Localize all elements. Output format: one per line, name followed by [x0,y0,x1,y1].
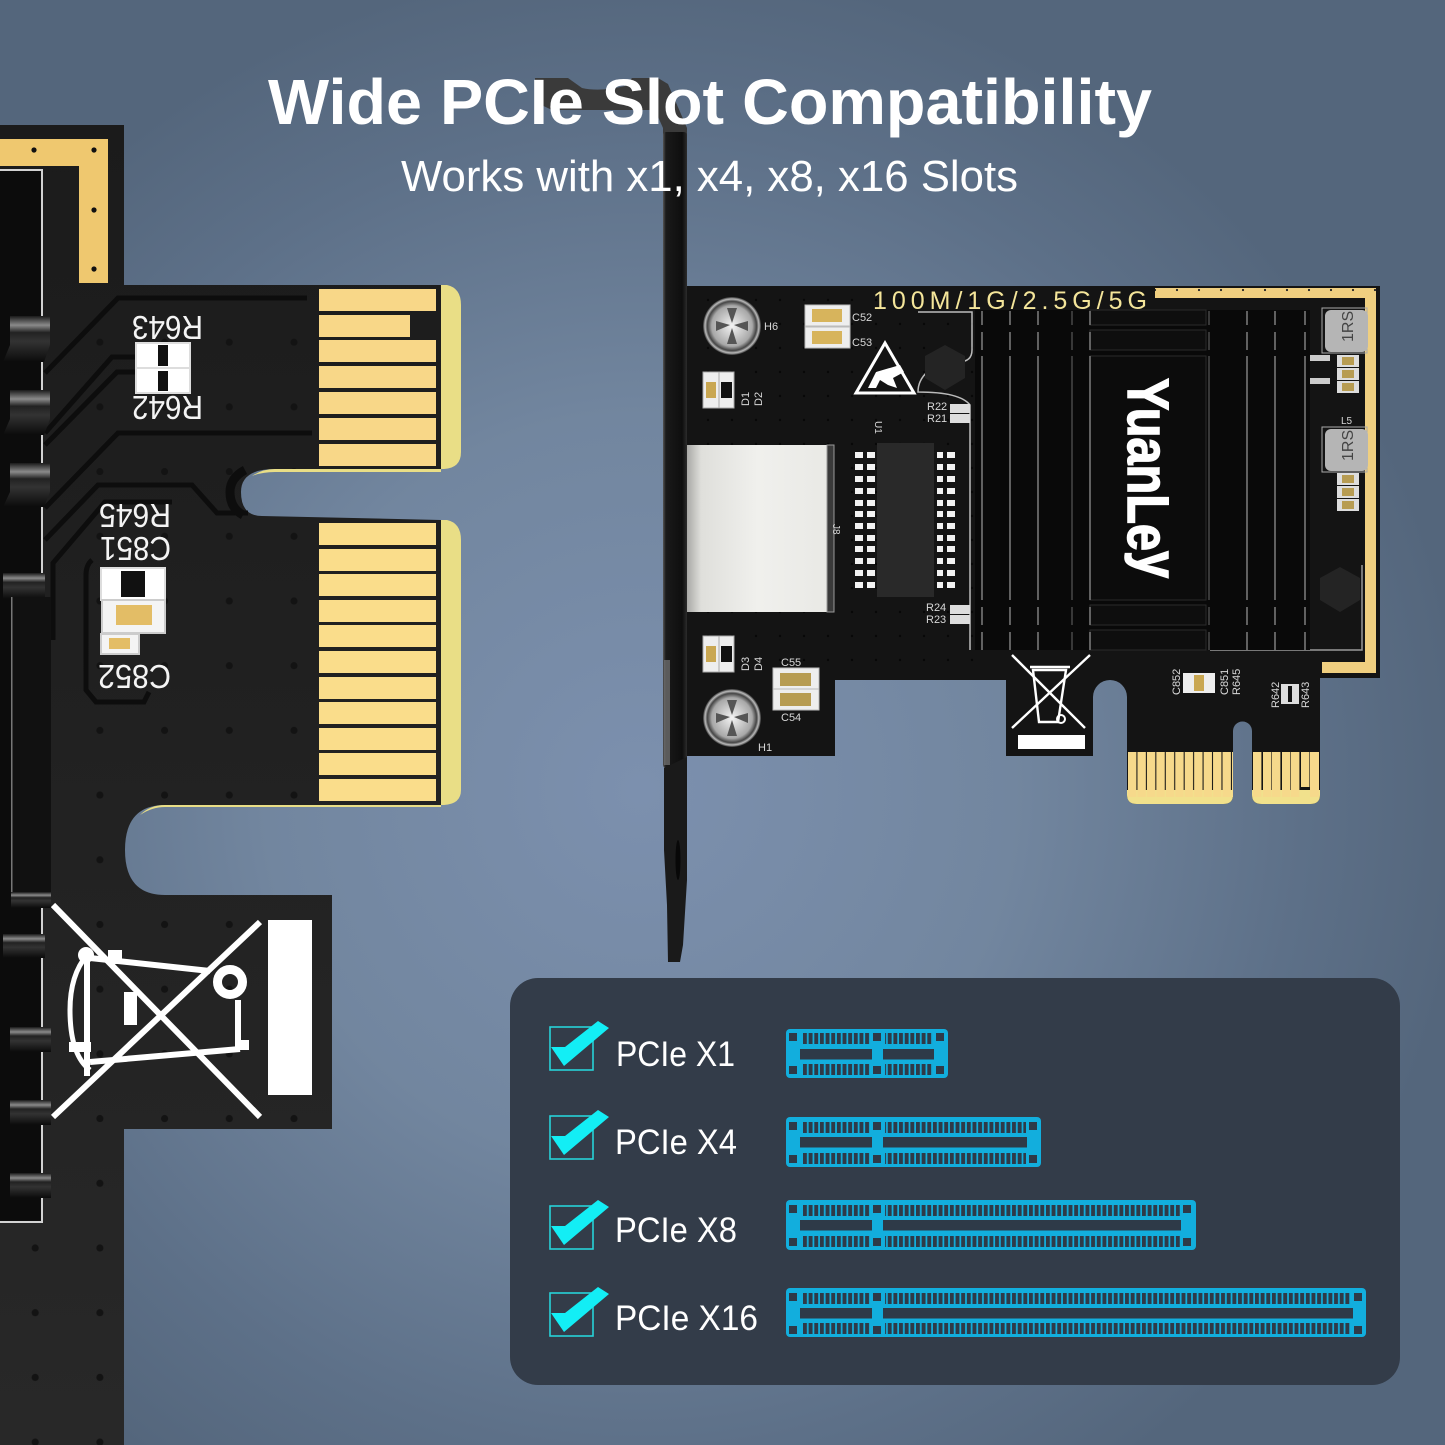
subtitle: Works with x1, x4, x8, x16 Slots [401,152,1018,201]
right card silk labels: R645 [1231,669,1243,695]
inductors 1RS: 1RS [1340,430,1357,461]
right card silk labels: C54 [781,712,801,724]
left gold L corner [0,139,108,283]
right card silk labels: R24 [926,602,946,614]
hex standoffs [925,345,1360,612]
right card silk labels: R642 [1270,682,1282,708]
slot X8 [786,1200,1196,1250]
left component labels: R642 [132,389,203,426]
left enlarged PCB [0,125,461,1445]
right card silk labels: C52 [852,312,872,324]
bracket top flange [535,78,687,145]
left gold contacts bottom [319,523,436,801]
slot X1 [786,1029,948,1078]
right card silk labels: H6 [764,321,778,333]
icon: ESD warning triangle [856,343,914,393]
right card silk labels: R21 [927,413,947,425]
right card silk labels: D3 [740,657,752,671]
left resistors R643 R642 [136,343,190,393]
row: PCIe X8 [550,1200,1196,1250]
row: PCIe X4 [550,1110,1041,1167]
right card silk labels: R22 [927,401,947,413]
inductors 1RS [1322,308,1368,472]
small SMD parts [703,305,1299,710]
heatsink [975,310,1310,650]
heatsink brand logo: YuanLe [1115,378,1180,584]
left gold edge top [252,285,461,476]
left component labels: R645 [99,497,171,534]
row: PCIe X1 [550,1021,948,1078]
left heatsink fins [3,316,51,1198]
left capacitors C851 C852 [101,568,165,654]
slot X16 [786,1288,1366,1337]
left component labels [98,309,203,695]
checkbox X8 [550,1200,609,1249]
checkbox X4 [550,1110,609,1159]
label X4: PCIe X4 [615,1123,737,1162]
title: Wide PCIe Slot Compatibility [268,66,1152,138]
left gold edge bottom [140,520,461,815]
bracket [535,78,687,962]
right white label block [1018,735,1085,749]
left component labels: R643 [132,309,203,346]
right card silk labels [740,312,1353,754]
right PCIe card [687,286,1380,804]
icon: screw H1 [703,689,761,747]
left traces [45,298,312,702]
right card silk labels: J8 [830,524,841,535]
right board outline [687,286,1380,804]
right card silk labels: C53 [852,337,872,349]
left white label block [268,920,312,1095]
panel background [510,978,1400,1385]
icon: screw H6 [703,297,761,355]
right card silk labels: R23 [926,614,946,626]
right card gold fingers [1127,752,1320,804]
label X8: PCIe X8 [615,1211,737,1250]
right card silk labels: H1 [758,742,772,754]
icon: left recycling bin crossed out [53,905,260,1117]
right gold border [1155,288,1376,673]
heatsink brand logo: y [1124,551,1189,578]
left component labels: C852 [98,658,171,695]
right card silk labels: C852 [1171,669,1183,695]
left gold contacts top [319,289,436,466]
capacitor stacks [1310,355,1359,511]
label X1: PCIe X1 [616,1035,735,1074]
checkbox X1 [550,1021,609,1070]
speed text: 100M/1G/2.5G/5G [873,287,1147,315]
bracket lower tab [664,757,687,962]
U1 chip pins [855,452,955,588]
right card silk labels: D1 [740,392,752,406]
board outline silk [918,312,972,650]
right card silk labels: L5 [1341,416,1353,427]
RJ45 port [687,445,834,612]
right card silk labels: U1 [872,421,883,434]
left component labels: C851 [100,530,171,567]
slot X4 [786,1117,1041,1167]
right card silk labels: D2 [753,392,765,406]
right card silk labels: C55 [781,657,801,669]
left board outline [0,125,441,1445]
panel: slot compatibility [510,978,1400,1385]
U1 chip [877,443,934,597]
icon: right recycling bin crossed out [1012,655,1090,728]
row: PCIe X16 [550,1287,1366,1338]
right card silk labels: D4 [753,657,765,671]
right card silk labels: C851 [1219,669,1231,695]
label X16: PCIe X16 [615,1299,758,1338]
right card silk labels: R643 [1300,682,1312,708]
checkbox X16 [550,1287,609,1336]
bracket vertical body [663,132,687,768]
inductors 1RS: 1RS [1340,311,1357,342]
left heatsink base [0,170,42,1222]
heatsink fin lines [982,311,1305,650]
